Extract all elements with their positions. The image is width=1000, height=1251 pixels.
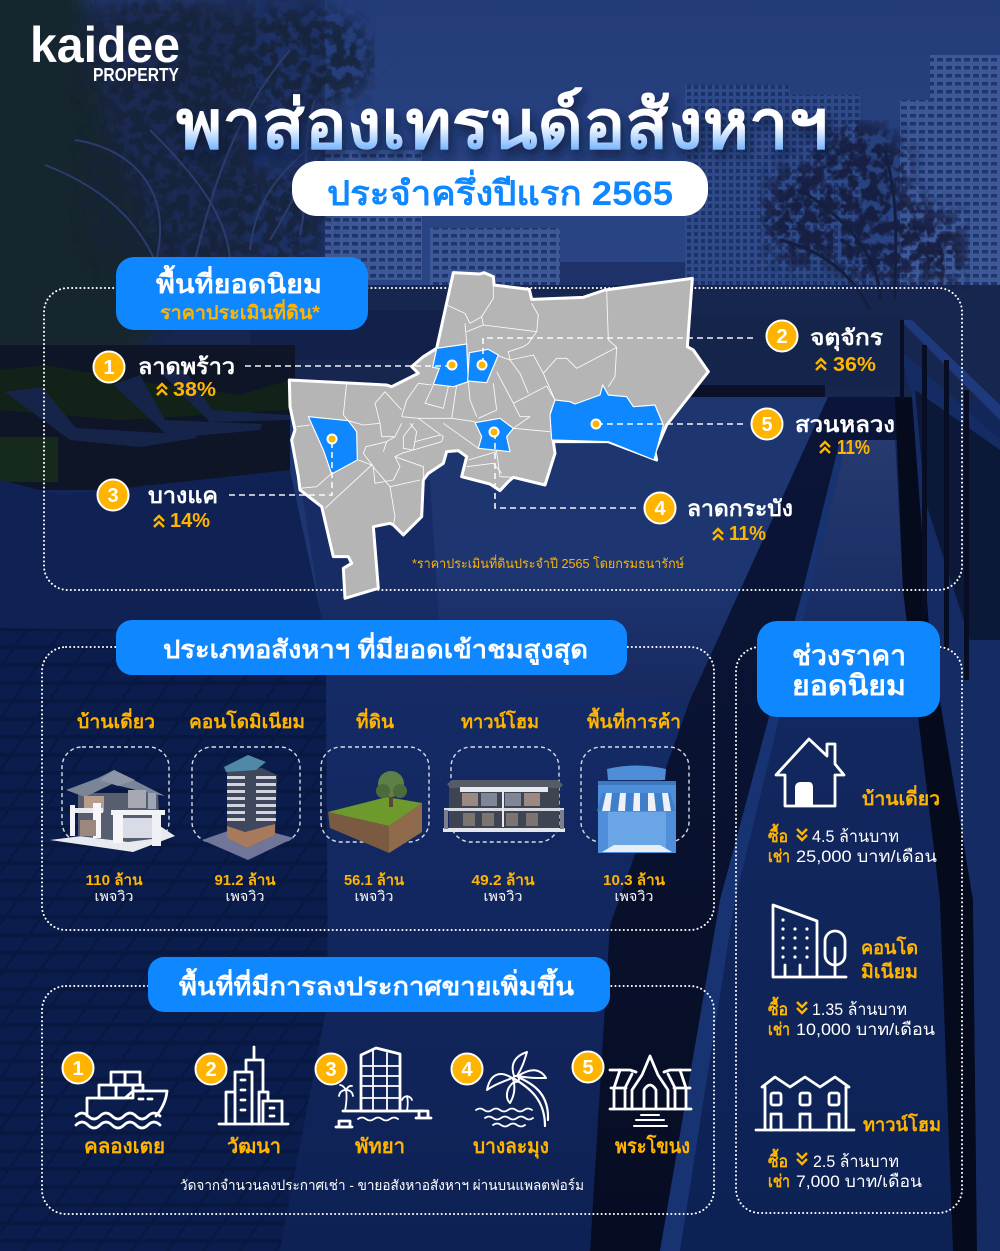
walkway	[680, 440, 953, 1251]
footnote: land appraisal source: *ราคาประเมินที่ดินประจำปี 2565 โดยกรมธนารักษ์	[412, 555, 684, 571]
heading pill: popular areas: ราคาประเมินที่ดิน*	[160, 299, 321, 324]
price block: townhome: 7,000 บาท/เดือน	[796, 1172, 922, 1191]
heading pill: ยอดนิยม	[792, 670, 906, 701]
heading pill: ประเภทอสังหาฯ ที่มียอดเข้าชมสูงสุด	[163, 632, 588, 666]
area 1: Khlong Toei: 1	[72, 1058, 84, 1080]
area 3: Pattaya: พัทยา	[355, 1136, 405, 1158]
panel: most viewed property types	[42, 620, 714, 930]
area 2: Watthana	[196, 1047, 288, 1158]
trees: right foliage	[760, 120, 970, 310]
panel: areas with increasing listings	[42, 957, 714, 1214]
icon: Thai temple	[610, 1056, 691, 1126]
background buildings	[225, 0, 1000, 305]
callout 5: Suan Luang 11%: 5	[761, 414, 773, 436]
district boundaries	[297, 285, 617, 525]
type: townhome 49.2M: 49.2 ล้าน	[472, 872, 535, 889]
heading pill	[116, 620, 627, 675]
right side railing area	[900, 350, 1000, 1251]
area 2: Watthana: 2	[205, 1059, 217, 1081]
area 5: Phra Khanong: พระโขนง	[615, 1134, 690, 1158]
type: commercial space 10.3M: เพจวิว	[614, 888, 654, 904]
heading pill: popular areas: พื้นที่ยอดนิยม	[156, 264, 322, 299]
type: condominium 91.2M: 91.2 ล้าน	[214, 872, 276, 889]
subtitle pill: ประจำครึ่งปีแรก 2565	[327, 169, 673, 213]
image: blue shop front	[597, 766, 676, 853]
price block: detached house: ซื้อ	[768, 823, 788, 846]
callout 2: Chatuchak 36%: 36%	[833, 354, 876, 376]
title: พาส่องเทรนด์อสังหาฯ	[176, 87, 828, 163]
logo: kaidee property: kaidee	[30, 17, 180, 73]
type: condominium 91.2M: คอนโดมิเนียม	[189, 710, 305, 733]
type: commercial space 10.3M: พื้นที่การค้า	[587, 707, 681, 733]
type: detached house 110M: 110 ล้าน	[86, 872, 143, 889]
leader lines	[229, 338, 755, 508]
type: detached house 110M	[50, 708, 175, 904]
callout 3: Bang Khae 14%	[98, 480, 218, 532]
type: land 56.1M: ที่ดิน	[356, 708, 394, 733]
callout 4: Lat Krabang 11%	[644, 492, 793, 545]
price block: detached house: 4.5 ล้านบาท	[812, 827, 899, 846]
icon: cargo ship	[76, 1072, 167, 1128]
icon: beach hotel	[336, 1048, 431, 1127]
price block: detached house	[768, 739, 940, 866]
pool deck with loungers and hedges	[0, 345, 295, 490]
highlighted district: Lat Phrao	[433, 344, 468, 387]
highlighted district: Bang Khae	[308, 417, 357, 474]
highlighted district: Lat Krabang	[475, 418, 513, 452]
callout 1: Lat Phrao 38%: 1	[103, 357, 115, 379]
map markers	[328, 360, 600, 444]
heading pill: ช่วงราคา	[792, 640, 906, 671]
price block: townhome: ซื้อ	[768, 1148, 788, 1171]
image: land block with tree	[328, 771, 422, 853]
price block: condominium: 1.35 ล้านบาท	[812, 1000, 907, 1019]
heading pill: popular areas	[116, 257, 368, 330]
icon: condo and tree	[773, 905, 846, 977]
subtitle pill	[292, 161, 708, 216]
callout 3: Bang Khae 14%: บางแค	[148, 483, 218, 508]
panel: popular areas by land appraisal	[44, 273, 962, 598]
area 4: Bang Lamung: 4	[461, 1059, 473, 1081]
price block: townhome: 2.5 ล้านบาท	[813, 1152, 899, 1171]
terrace band	[0, 285, 1000, 400]
heading pill	[757, 621, 940, 717]
highlighted district: Chatuchak	[468, 349, 498, 383]
image: townhomes	[443, 780, 565, 832]
area 3: Pattaya: 3	[325, 1059, 337, 1081]
callout 3: Bang Khae 14%: 3	[107, 485, 119, 507]
type: detached house 110M: เพจวิว	[94, 888, 134, 904]
callout 1: Lat Phrao 38%	[94, 352, 235, 401]
type: condominium 91.2M: เพจวิว	[226, 888, 264, 904]
logo: kaidee property: PROPERTY	[93, 65, 179, 85]
area 2: Watthana: วัฒนา	[227, 1136, 281, 1158]
tiled pool floor	[0, 628, 328, 1251]
pool water	[290, 397, 828, 700]
price block: condominium: คอนโด	[861, 936, 918, 959]
stone ledge	[660, 440, 847, 1251]
type: townhome 49.2M: เพจวิว	[484, 888, 522, 904]
trees: left foliage and bare branches	[0, 0, 395, 360]
price block: detached house: 25,000 บาท/เดือน	[796, 847, 937, 866]
area 1: Khlong Toei	[62, 1052, 167, 1158]
icon: house outline	[776, 739, 844, 806]
area 5: Phra Khanong	[572, 1052, 691, 1158]
area 3: Pattaya	[316, 1048, 431, 1158]
callout 4: Lat Krabang 11%: 11%	[729, 523, 766, 545]
callout 3: Bang Khae 14%: 14%	[170, 510, 210, 532]
type: land 56.1M: เพจวิว	[354, 888, 394, 904]
callout 4: Lat Krabang 11%: 4	[654, 498, 666, 520]
image: condominium tower	[202, 755, 294, 860]
price block: detached house: เช่า	[768, 847, 790, 866]
panel: popular price ranges	[736, 621, 962, 1213]
type: townhome 49.2M: ทาวน์โฮม	[461, 710, 539, 733]
price block: condominium: ซื้อ	[768, 996, 788, 1019]
area 4: Bang Lamung	[452, 1052, 549, 1159]
type: commercial space 10.3M: 10.3 ล้าน	[603, 872, 666, 889]
area 4: Bang Lamung: บางละมุง	[473, 1136, 549, 1159]
callout 5: Suan Luang 11%	[752, 408, 895, 459]
dark wall strip	[895, 397, 977, 1251]
callout 1: Lat Phrao 38%: 38%	[173, 379, 216, 401]
type: land 56.1M	[321, 708, 429, 904]
heading pill	[148, 957, 610, 1012]
image: detached house	[50, 770, 175, 852]
callout 2: Chatuchak 36%: 2	[776, 326, 788, 348]
price block: detached house: บ้านเดี่ยว	[862, 785, 940, 810]
area 1: Khlong Toei: คลองเตย	[84, 1136, 165, 1158]
icon: townhome row	[756, 1077, 854, 1130]
callout 2: Chatuchak 36%: จตุจักร	[810, 325, 883, 352]
type: townhome 49.2M	[443, 710, 565, 904]
icon: coconut palm and sea	[476, 1052, 548, 1126]
type: detached house 110M: บ้านเดี่ยว	[77, 708, 155, 733]
price block: townhome: เช่า	[768, 1172, 790, 1191]
type: condominium 91.2M	[189, 710, 305, 904]
price block: condominium: เช่า	[768, 1020, 790, 1039]
callout 2: Chatuchak 36%	[766, 320, 883, 376]
price block: townhome	[756, 1077, 941, 1191]
price block: condominium: 10,000 บาท/เดือน	[796, 1020, 935, 1039]
heading pill: พื้นที่ที่มีการลงประกาศขายเพิ่มขึ้น	[179, 967, 574, 1001]
map: Bangkok districts	[289, 273, 708, 598]
highlighted district: Suan Luang	[550, 385, 663, 460]
callout 1: Lat Phrao 38%: ลาดพร้าว	[138, 354, 235, 379]
callout 5: Suan Luang 11%: 11%	[837, 437, 870, 459]
type: land 56.1M: 56.1 ล้าน	[344, 872, 405, 889]
icon: city towers	[219, 1047, 288, 1124]
callout 5: Suan Luang 11%: สวนหลวง	[795, 412, 895, 437]
type: commercial space 10.3M	[581, 707, 689, 904]
price block: condominium: มิเนียม	[861, 961, 918, 983]
planter band	[590, 397, 912, 1251]
caption: how listings are measured: วัดจากจำนวนลงประกาศเช่า - ขายอสังหาอสังหาฯ ผ่านบนแพลตฟอร์ม	[180, 1177, 584, 1193]
callout 4: Lat Krabang 11%: ลาดกระบัง	[687, 496, 793, 521]
area 5: Phra Khanong: 5	[582, 1057, 594, 1079]
price block: townhome: ทาวน์โฮม	[863, 1113, 941, 1136]
price block: condominium	[768, 905, 935, 1039]
